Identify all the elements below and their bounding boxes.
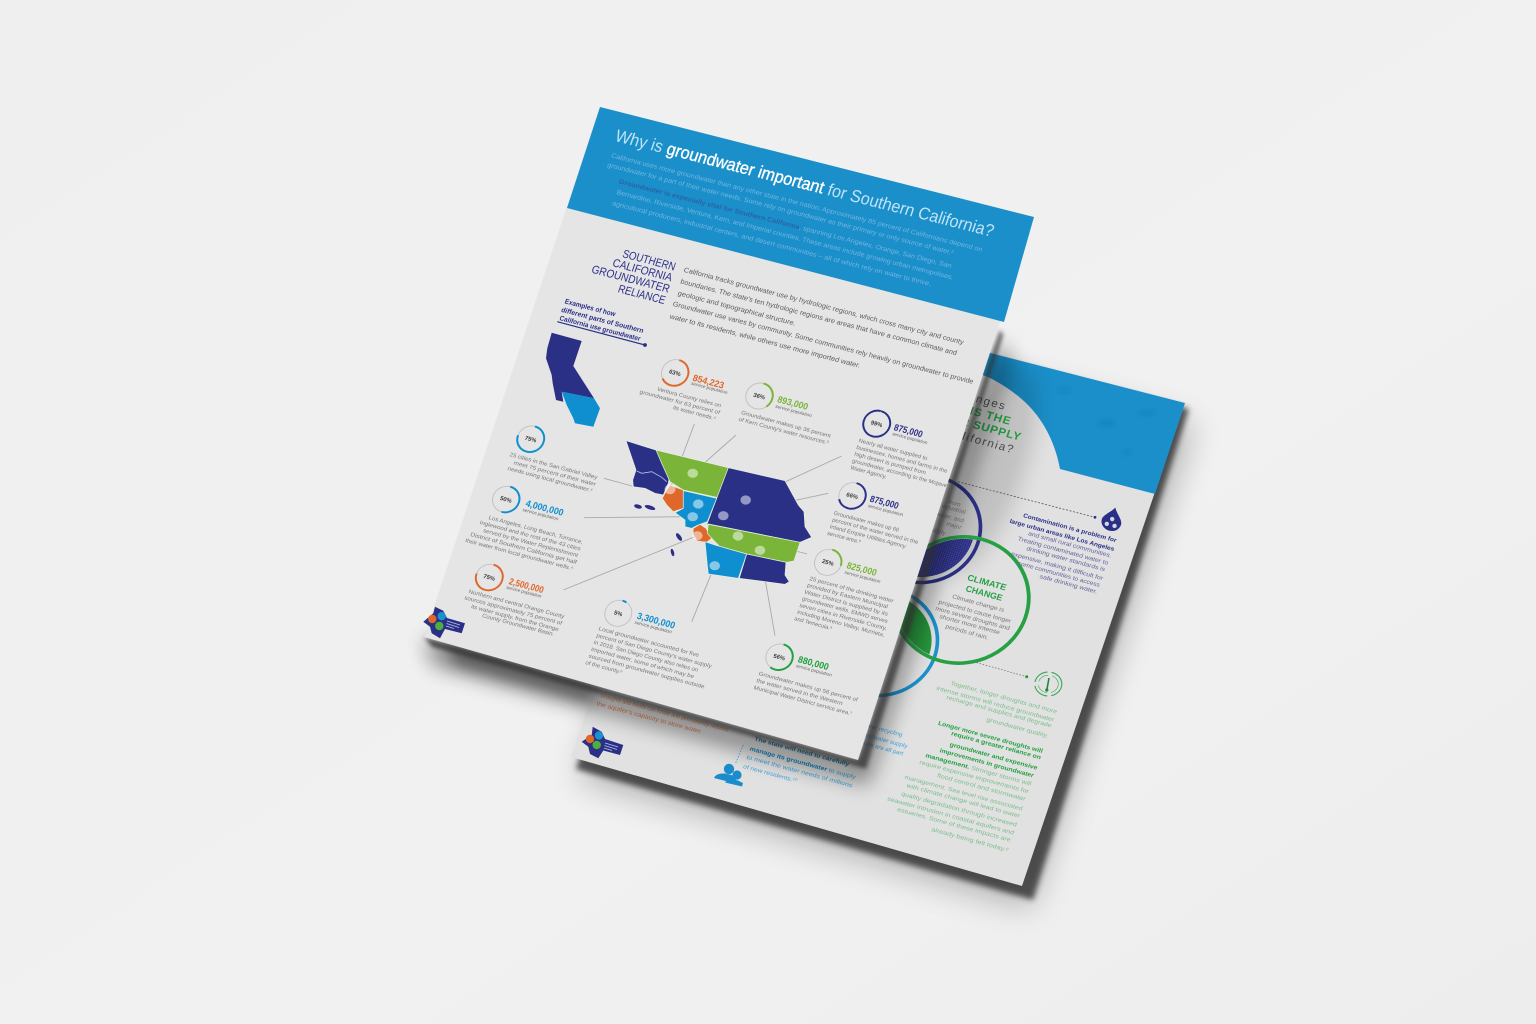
stat: Western Municipal 56% <box>753 641 859 717</box>
stat: Eastern Municipal 25%: provided by Eastern Municipal <box>806 583 889 610</box>
climate change circle: CHANGE <box>964 584 1004 603</box>
stat: Inland Empire 66%: 66% <box>845 492 859 501</box>
stat: Eastern Municipal 25%: service population <box>844 570 882 584</box>
stat: Western Municipal 56%: the water served in the Western <box>755 678 843 707</box>
climate impact text <box>886 681 1058 854</box>
body text: water to its residents, while others use more imported water. <box>668 313 861 370</box>
stat: San Gabriel Valley 75%: 75% <box>524 436 538 445</box>
climate impact text: require expensive improvements for <box>918 760 1029 795</box>
stat: Kern County 36%: 893,000 <box>776 393 810 412</box>
stat: Inland Empire 66%: 875,000 <box>869 493 900 511</box>
contamination callout text: Contamination is a problem for <box>1022 513 1118 544</box>
stat: Western Municipal 56%: Municipal Water District service area.⁷ <box>753 684 853 717</box>
stat: Kern County 36%: service population <box>775 404 813 418</box>
title: Why is groundwater important for Southern California? <box>613 125 997 241</box>
stat: Kern County 36%: of Kern County's water resources.⁵ <box>738 416 830 446</box>
contamination circle: water, and <box>934 511 965 525</box>
stat: Mojave 99%: 875,000 <box>893 421 924 439</box>
stat: Western Municipal 56%: service population <box>795 663 833 678</box>
climate impact text: management. Sea level rise associated <box>904 775 1023 812</box>
stat: Eastern Municipal 25%: groundwater wells. EMWD serves <box>801 596 889 625</box>
map county boundary line <box>637 471 667 482</box>
contamination circle: major <box>945 522 962 531</box>
stat: San Diego 5%: in 2018. San Diego County also relies on <box>593 640 699 674</box>
subsidence text: the aquifer's capacity to store water. <box>595 701 703 736</box>
stat: Water Replenishment District 50%: 50% <box>499 496 513 505</box>
front sheet: shadows <box>424 330 1010 785</box>
stat: San Diego 5%: sourced from groundwater supplies outside <box>588 654 705 690</box>
panel: back sheet <box>575 353 1185 886</box>
climate impact text: estuaries. Some of these impacts are <box>896 807 1012 844</box>
climate callout connector <box>973 662 1028 678</box>
stat: Water Replenishment District 50%: served by the Water Replenishment <box>482 528 579 559</box>
stat: Eastern Municipal 25%: and Temecula.⁹ <box>793 615 834 632</box>
stat: Western Municipal 56%: 880,000 <box>797 653 830 672</box>
stat: Kern County 36%: Groundwater makes up 36 percent <box>740 410 832 440</box>
stat: Mojave 99%: businesses, homes and farms in the <box>855 445 948 475</box>
California locator map <box>546 333 600 427</box>
back sheet heading: in Southern California? <box>866 405 1016 456</box>
stat: Water Replenishment District 50%: District of Southern California get half <box>469 532 578 566</box>
stat: Orange County 75%: County Groundwater Basin. <box>481 613 555 638</box>
header intro text: agricultural producers, industrial centers, and desert communities – all of which rely on water to thrive. <box>611 200 932 288</box>
stat: Orange County 75%: its water supply, from the Orange <box>470 604 559 633</box>
stat: Ventura County 63%: groundwater for 63 percent of <box>639 389 721 416</box>
population callout text: manage its groundwater to supply <box>749 747 857 781</box>
stat: Mojave 99%: Nearly all water supplied to <box>858 438 928 462</box>
header intro text <box>606 153 984 288</box>
stat: San Gabriel Valley 75% <box>507 423 598 494</box>
stat: San Diego 5%: 5% <box>613 610 624 618</box>
stat: Western Municipal 56%: 56% <box>772 654 786 663</box>
stat: San Diego 5% <box>584 597 712 690</box>
contamination circle: supply <box>927 527 947 537</box>
header intro text: Groundwater is especially vital for Southern California , spanning Los Angeles, Orange, San Diego, San <box>618 179 953 270</box>
stat: Mojave 99%: 99% <box>870 420 884 429</box>
contamination circle: industrial <box>941 504 966 516</box>
examples subheading with arrow: different parts of Southern <box>560 307 644 335</box>
icon: people <box>714 764 743 786</box>
recycling text fragment: Water recycling <box>860 722 903 739</box>
body text: boundaries. The state's ten hydrologic regions are areas that have a common climate and <box>679 279 958 357</box>
climate change circle: periods of rain. <box>944 624 989 642</box>
stat: San Gabriel Valley 75%: needs using local groundwater.⁴ <box>507 465 594 494</box>
heading: Southern California Groundwater Reliance: RELIANCE <box>616 283 667 307</box>
stat: San Diego 5%: 3,300,000 <box>636 610 677 631</box>
stat: Mojave 99%: groundwater, according to the Mojave <box>851 458 948 489</box>
stat: Eastern Municipal 25%: 25% <box>821 559 835 568</box>
contamination circle: from <box>947 500 961 509</box>
stat: Orange County 75%: sources approximately 75 percent of <box>463 595 563 627</box>
stat: Eastern Municipal 25%: 25 percent of the drinking water <box>808 576 894 605</box>
climate impact text: flood control and stormwater <box>936 773 1026 803</box>
recycling text fragment <box>843 722 909 757</box>
climate impact text: improvements in groundwater <box>939 748 1035 780</box>
mockup scene: two overlapping sheets <box>416 107 1202 920</box>
logo: back sheet <box>582 727 623 758</box>
stat: Water Replenishment District 50% <box>464 483 584 572</box>
contamination callout text: some communities to access <box>1017 561 1100 589</box>
stat: San Gabriel Valley 75%: 25 cities in the San Gabriel Valley <box>509 452 598 481</box>
front sheet blue header <box>567 107 1034 322</box>
stat: Kern County 36% <box>738 380 832 446</box>
contamination circle <box>915 478 982 584</box>
stat: Ventura County 63%: service population <box>690 381 729 395</box>
population callout text <box>736 737 857 789</box>
header intro text: California uses more groundwater than any other state in the nation. Approximately 85 percent of Californians depend on <box>610 153 984 254</box>
back sheet heading: WATER SUPPLY <box>924 407 1023 443</box>
climate impact text: already being felt today.⁸ <box>930 826 1010 854</box>
stat: Eastern Municipal 25% <box>793 546 894 639</box>
stat: Eastern Municipal 25%: 825,000 <box>845 559 878 578</box>
climate change circle: shorter more intense <box>938 614 1001 636</box>
stat: Inland Empire 66% <box>826 480 919 550</box>
stat: San Gabriel Valley 75%: meet 75 percent of their water <box>513 461 597 488</box>
back sheet heading <box>866 374 1023 456</box>
climate impact text: Together, longer droughts and more <box>949 681 1058 716</box>
contamination callout text <box>958 482 1118 596</box>
Southern California regions map <box>626 441 812 584</box>
population callout text: of new residents.¹⁰ <box>742 763 799 785</box>
heading: Southern California Groundwater Reliance: SOUTHERN <box>621 248 677 273</box>
stat: Water Replenishment District 50%: their water from local groundwater wells.⁴ <box>464 537 575 572</box>
stat: Ventura County 63%: Ventura County relies on <box>656 387 722 409</box>
heading: Southern California Groundwater Reliance: CALIFORNIA <box>611 257 674 284</box>
back sheet header mottling <box>1057 387 1155 455</box>
stat: Water Replenishment District 50%: service population <box>522 507 560 522</box>
stat: Mojave 99% <box>849 408 948 489</box>
stat: Water Replenishment District 50%: 4,000,000 <box>524 497 565 518</box>
stat: Ventura County 63%: 854,223 <box>691 372 726 391</box>
heading: Southern California Groundwater Reliance: GROUNDWATER <box>590 264 671 296</box>
logo: front sheet <box>423 607 465 638</box>
population callout text: The state will need to carefully <box>753 737 850 768</box>
body text: California tracks groundwater use by hydrologic regions, which cross many city and county <box>683 267 965 347</box>
stat: Kern County 36%: 36% <box>752 393 766 402</box>
icon: water drop with radiation symbol <box>1099 505 1125 533</box>
stat: Ventura County 63%: its water needs.⁴ <box>672 404 717 422</box>
stat: Eastern Municipal 25%: Water District is supplied by its <box>803 590 889 618</box>
leader lines <box>563 424 842 636</box>
stat: Inland Empire 66%: percent of the water served in the <box>831 517 919 546</box>
stat: Ventura County 63%: 63% <box>668 369 682 378</box>
back sheet heading: What challenges <box>900 374 1008 413</box>
heading: Southern California Groundwater Reliance <box>590 248 677 307</box>
climate impact text: seawater intrusion in coastal aquifers and <box>886 797 1015 837</box>
climate change circle: Climate change is <box>951 594 1005 614</box>
panel: front sheet <box>423 107 1034 760</box>
climate change circle: more severe droughts and <box>934 606 1010 632</box>
climate change circle: projected to cause longer <box>938 600 1012 625</box>
climate impact text: groundwater and expensive <box>949 742 1039 772</box>
stat: Ventura County 63% <box>639 357 729 422</box>
stat: Western Municipal 56%: Groundwater makes up 56 percent of <box>758 671 859 704</box>
stat: Inland Empire 66%: Inland Empire Utilities Agency <box>829 524 907 550</box>
stat: Mojave 99%: Water Agency. <box>849 465 888 481</box>
climate impact text: require a greater reliance on <box>950 731 1042 761</box>
stat: Eastern Municipal 25%: seven cities in Riverside County, <box>798 603 888 632</box>
stat: Water Replenishment District 50%: Inglewood and the rest of the 43 cities <box>479 520 582 553</box>
map location dots <box>664 469 765 570</box>
stat: Orange County 75% <box>463 561 565 638</box>
recycling text fragment: and groundwater supply <box>843 727 909 750</box>
recycling text fragment: options are all part <box>853 739 904 757</box>
climate impact text: groundwater quality. <box>985 717 1049 740</box>
stat: Mojave 99%: service population <box>892 431 929 445</box>
body text: geologic and topographical structure. <box>677 290 797 328</box>
stat: Orange County 75%: 2,500,000 <box>508 575 546 595</box>
body text: Groundwater use varies by community. Some communities rely heavily on groundwater to provide <box>672 301 974 386</box>
stat: Orange County 75%: Northern and central Orange County <box>468 589 565 620</box>
stat: Orange County 75%: service population <box>506 585 543 599</box>
stat: San Diego 5%: Local groundwater accounted for five <box>598 626 700 659</box>
climate impact text: quality degradation through increased <box>900 792 1017 829</box>
examples subheading with arrow: California use groundwater <box>558 315 642 343</box>
stat: Inland Empire 66%: Groundwater makes up 66 <box>833 511 900 534</box>
map islands <box>634 504 683 557</box>
contamination callout text: large urban areas like Los Angeles <box>1009 519 1116 553</box>
climate impact text: recharge and supplies and degrade <box>945 695 1053 730</box>
examples subheading with arrow <box>557 299 647 347</box>
stat: Inland Empire 66%: service population <box>867 503 904 517</box>
examples subheading with arrow: Examples of how <box>564 299 617 318</box>
stat: Eastern Municipal 25%: including Moreno Valley, Murrieta, <box>796 610 886 639</box>
stat: Orange County 75%: 75% <box>482 574 496 583</box>
back sheet soft fold shading <box>912 354 1058 586</box>
subsidence text: Droughts and floods can rotate and permanently reduces <box>599 693 729 734</box>
climate change circle: CLIMATE <box>966 573 1008 592</box>
stat: Water Replenishment District 50%: Los Angeles, Long Beach, Torrance, <box>488 515 584 546</box>
climate impact text: with climate change will lead to water <box>904 783 1021 820</box>
climate impact text: Longer more severe droughts will <box>937 721 1044 755</box>
contamination callout text: and small rural communities. <box>1027 531 1113 560</box>
header intro text: groundwater for a part of their water needs. Some rely on groundwater as their primary or only source of water.² <box>606 162 955 257</box>
stat: Inland Empire 66%: service area.⁸ <box>826 530 863 546</box>
population circle <box>878 594 940 698</box>
header intro text: Bernardino, Riverside, Ventura, Kern, and Imperial counties. These areas include growing urban metropolises, <box>615 189 954 282</box>
stat: San Diego 5%: imported water, some of which may be <box>590 647 695 680</box>
contamination callout text: expensive, making it difficult for <box>1010 552 1104 582</box>
back sheet: shadows <box>576 293 1193 908</box>
contamination callout text: drinking water standards is <box>1025 546 1106 573</box>
contamination callout text: Treating contaminated water to <box>1017 537 1110 567</box>
climate impact text: management. Stronger storms will <box>924 753 1032 788</box>
climate impact text: intense storms will reduce groundwater <box>935 686 1055 723</box>
back sheet heading: THREATENS THE <box>905 388 1013 428</box>
stat: San Diego 5%: service population <box>634 620 673 635</box>
stat: San Diego 5%: of the county.⁶ <box>584 659 624 676</box>
body text <box>668 267 974 386</box>
contamination callout text: safe drinking water. <box>1039 574 1098 596</box>
climate change circle <box>875 522 1047 678</box>
icon: climate thermometer with arrows <box>1035 672 1062 696</box>
population callout text: to meet the water needs of millions <box>745 755 853 789</box>
back sheet blue header with curved cutout <box>733 287 1185 494</box>
stat: San Diego 5%: percent of San Diego County's water supply <box>595 633 712 670</box>
stat: Mojave 99%: high desert is pumped from <box>853 452 927 476</box>
